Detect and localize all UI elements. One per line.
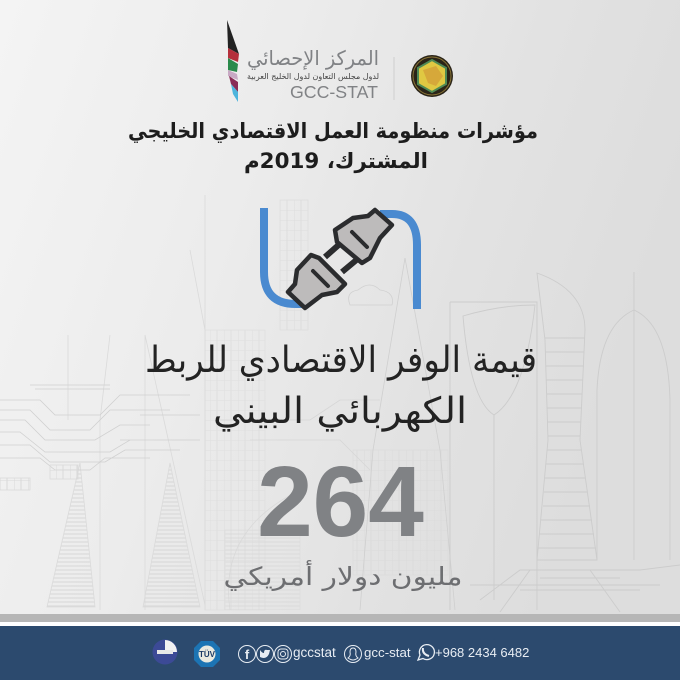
big number: 264	[257, 446, 424, 558]
icon: TUV badge	[194, 641, 220, 667]
icon: TUV badge: TÜV	[199, 650, 216, 659]
logo arabic name: المركز الإحصائي	[247, 46, 379, 71]
left cable	[264, 208, 302, 304]
icon: GCC emblem	[411, 55, 453, 97]
logo latin name: GCC-STAT	[290, 82, 378, 102]
title	[128, 119, 538, 173]
title: المشترك، 2019م	[244, 149, 428, 173]
footer panel	[0, 626, 680, 680]
icon: twitter	[256, 646, 274, 662]
icon: electrical plug connection	[264, 208, 417, 309]
skyline towers on the right	[450, 272, 680, 612]
skyline line art	[0, 195, 455, 610]
heading: قيمة الوفر الاقتصادي للربط	[145, 340, 537, 381]
logo: GCC-STAT	[227, 20, 379, 102]
icon: certification seal	[152, 640, 178, 664]
icon: instagram	[274, 646, 292, 662]
footer stripes	[0, 614, 680, 626]
handle: gccstat: gccstat	[293, 645, 336, 660]
social icons and handle	[238, 645, 336, 662]
icon: whatsapp	[418, 645, 434, 660]
lower plug	[288, 255, 345, 308]
title: مؤشرات منظومة العمل الاقتصادي الخليجي	[128, 119, 538, 144]
logo ribbon	[227, 20, 239, 102]
handle: gcc-stat: gcc-stat	[364, 645, 411, 660]
icon: facebook: f	[245, 647, 250, 662]
whatsapp contact	[418, 645, 529, 660]
logo arabic subtitle: لدول مجلس التعاون لدول الخليج العربية	[247, 72, 379, 81]
heading: الكهربائي البيني	[213, 391, 467, 432]
plug prongs	[325, 242, 360, 272]
icon: snapchat	[344, 646, 362, 662]
snapchat contact	[344, 645, 411, 662]
heading	[145, 340, 537, 432]
phone number: +968 2434 6482	[435, 645, 529, 660]
right cable	[380, 214, 417, 309]
upper plug	[335, 210, 392, 263]
unit label: مليون دولار أمريكي	[224, 559, 462, 592]
